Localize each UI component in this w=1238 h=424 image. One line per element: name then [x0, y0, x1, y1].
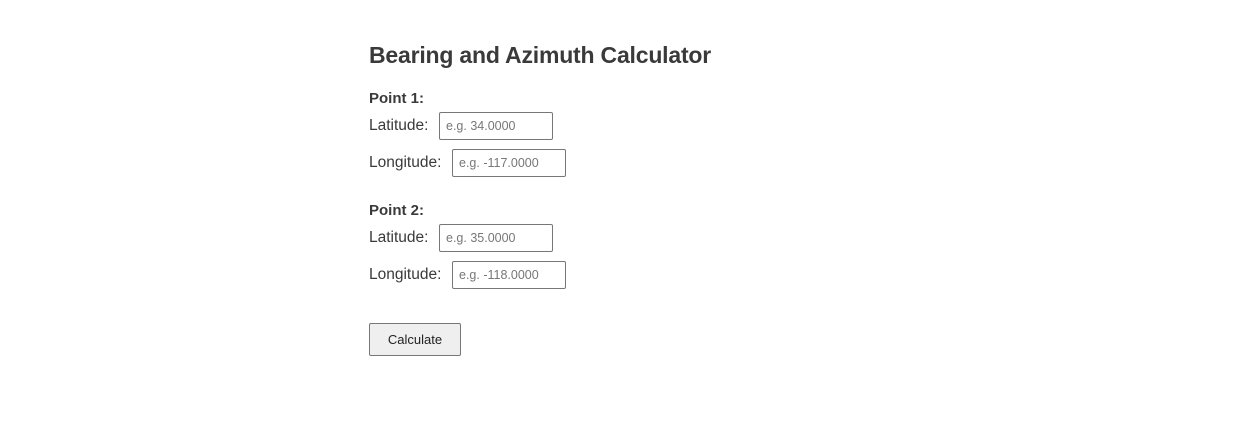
label: longitude 2: Longitude: [369, 266, 441, 283]
input: longitude 1: e.g. -117.0000 [459, 156, 539, 170]
label: longitude 1: Longitude: [369, 154, 441, 171]
input: latitude 2: e.g. 35.0000 [446, 231, 516, 245]
title: Bearing and Azimuth Calculator [369, 42, 711, 68]
input: longitude 2 [452, 261, 566, 289]
input: latitude 2 [439, 224, 553, 252]
button: calculate: Calculate [388, 332, 442, 347]
input: longitude 2: e.g. -118.0000 [459, 268, 539, 282]
heading: point 1: Point 1: [369, 90, 424, 107]
label: latitude 1: Latitude: [369, 117, 428, 134]
input: longitude 1 [452, 149, 566, 177]
heading: point 2: Point 2: [369, 202, 424, 219]
label: latitude 2: Latitude: [369, 229, 428, 246]
input: latitude 1: e.g. 34.0000 [446, 119, 516, 133]
button: calculate [369, 323, 461, 356]
input: latitude 1 [439, 112, 553, 140]
